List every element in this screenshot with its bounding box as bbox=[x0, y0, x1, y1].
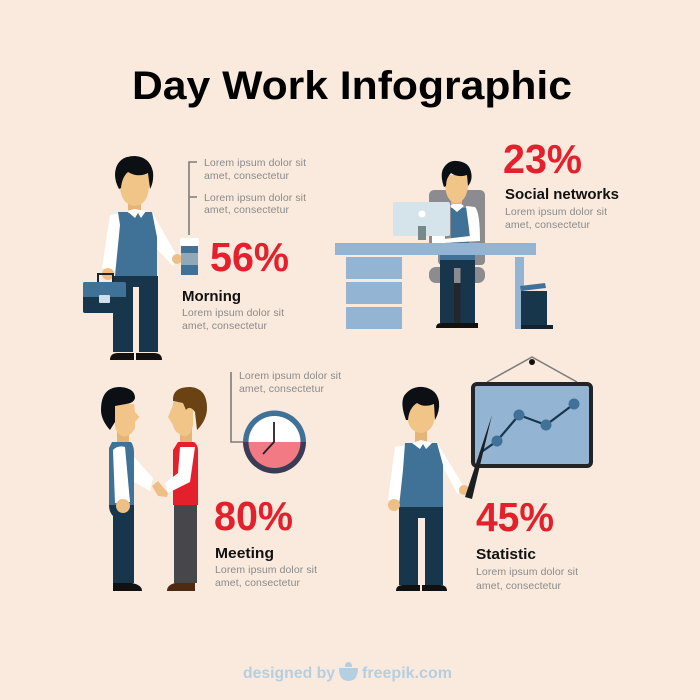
heading: social networks: Social networks bbox=[505, 186, 619, 203]
figure: man presenting bbox=[388, 387, 469, 591]
figure: man at desk bbox=[429, 161, 485, 328]
text block: notes: amet, consectetur bbox=[204, 170, 290, 182]
text block: social body bbox=[505, 206, 607, 231]
footer credit: designed by bbox=[243, 665, 335, 682]
text block: social body: Lorem ipsum dolor sit bbox=[505, 206, 607, 218]
number: 23%: 23% bbox=[503, 136, 582, 182]
icon: freepik mascot bbox=[339, 662, 358, 681]
icon: computer monitor bbox=[393, 202, 450, 240]
number: 80%: 80% bbox=[214, 493, 293, 539]
panel: meeting bbox=[101, 370, 341, 591]
icon: bin bbox=[520, 283, 553, 329]
text block: meeting body: Lorem ipsum dolor sit bbox=[215, 564, 317, 576]
panel: morning bbox=[83, 156, 306, 360]
text block: morning body: amet, consectetur bbox=[182, 320, 268, 332]
text block: notes: amet, consectetur bbox=[204, 204, 290, 216]
panel: statistic bbox=[388, 357, 591, 592]
desk bbox=[335, 243, 536, 329]
figure: right man shaking hands bbox=[152, 387, 207, 591]
title: Day Work Infographic bbox=[132, 64, 572, 108]
panel: social networks bbox=[335, 136, 619, 329]
text block: statistic body bbox=[476, 566, 578, 592]
icon: coffee cup bbox=[180, 238, 199, 275]
icon: clock bbox=[243, 411, 306, 473]
figure: man with briefcase and cup bbox=[83, 156, 199, 360]
heading: morning: Morning bbox=[182, 288, 241, 305]
figure: left man shaking hands bbox=[101, 387, 153, 591]
text block: social body: amet, consectetur bbox=[505, 219, 590, 231]
text block: morning body: Lorem ipsum dolor sit bbox=[182, 307, 284, 319]
number: 45%: 45% bbox=[476, 494, 554, 540]
heading: meeting: Meeting bbox=[215, 545, 274, 562]
bracket line bbox=[189, 162, 197, 235]
text block: meeting body: amet, consectetur bbox=[215, 577, 300, 589]
text block: meeting body bbox=[215, 564, 317, 589]
text block: notes: Lorem ipsum dolor sit bbox=[204, 192, 306, 204]
footer credit bbox=[243, 662, 452, 682]
text block: notes bbox=[204, 157, 306, 216]
bracket line bbox=[231, 372, 243, 442]
icon: briefcase bbox=[83, 274, 126, 313]
text block: statistic body: Lorem ipsum dolor sit bbox=[476, 566, 578, 578]
text block: meeting note bbox=[239, 370, 341, 395]
text block: notes: Lorem ipsum dolor sit bbox=[204, 157, 306, 169]
heading: statistic: Statistic bbox=[476, 546, 536, 563]
icon: chart board bbox=[473, 357, 591, 466]
text block: meeting note: amet, consectetur bbox=[239, 383, 324, 395]
footer credit: freepik.com bbox=[362, 665, 452, 682]
text block: morning body bbox=[182, 307, 284, 332]
text block: statistic body: amet, consectetur bbox=[476, 580, 562, 592]
pointer stick bbox=[465, 415, 492, 499]
text block: meeting note: Lorem ipsum dolor sit bbox=[239, 370, 341, 382]
number: 56%: 56% bbox=[210, 234, 289, 280]
